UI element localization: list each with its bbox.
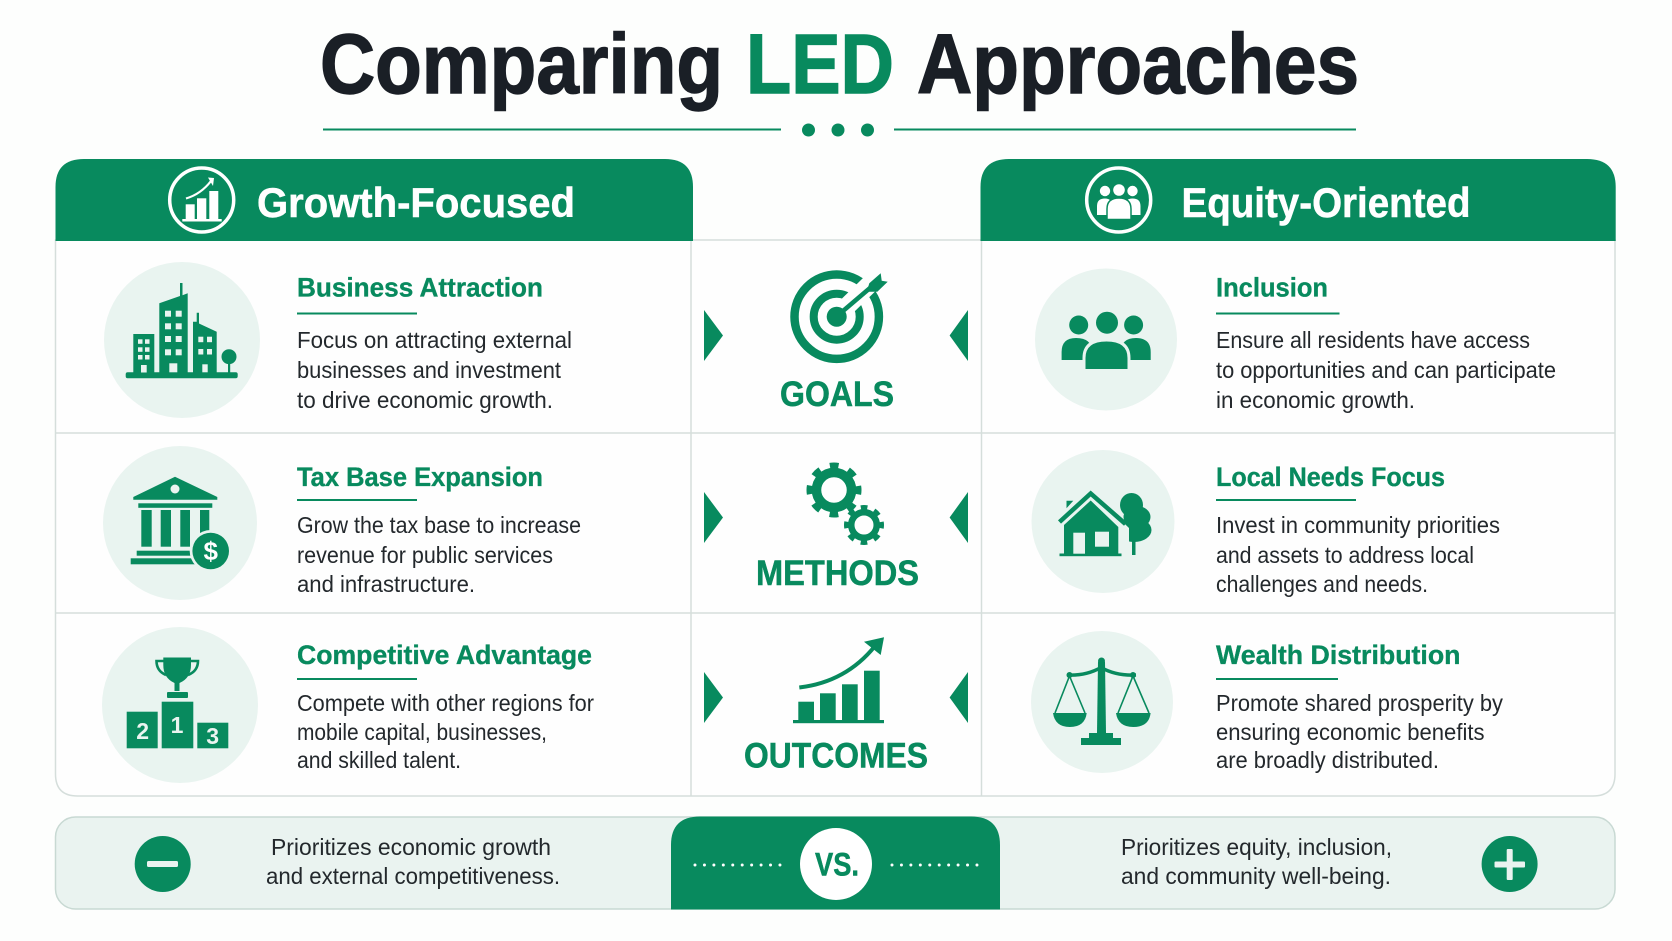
text: local needs focus: and assets to address local (1216, 542, 1474, 568)
text: competitive advantage: mobile capital, businesses, (297, 719, 547, 745)
arrow: goals left (704, 310, 723, 361)
text: competitive advantage (297, 690, 594, 773)
arrow: outcomes left (704, 672, 723, 723)
heading: wealth distribution: Wealth Distribution (1216, 640, 1460, 670)
icon: community people (1035, 268, 1177, 410)
text: local needs focus: challenges and needs. (1216, 571, 1428, 597)
icon: people badge (1087, 168, 1151, 232)
text: inclusion: Ensure all residents have access (1216, 327, 1530, 353)
title: Comparing (320, 17, 723, 111)
icon: gears (810, 466, 882, 542)
row: business attraction (104, 262, 572, 418)
vs badge (671, 816, 1000, 910)
arrow: methods left (704, 492, 723, 543)
text: business attraction (297, 327, 572, 413)
row: wealth distribution (1031, 631, 1503, 773)
text: tax base expansion: and infrastructure. (297, 571, 475, 597)
text: tax base expansion (297, 512, 581, 597)
icon: trophy on podium: 3 (206, 723, 219, 749)
text: growth summary: Prioritizes economic growth (271, 834, 551, 860)
header: equity-oriented: Equity-Oriented (1182, 179, 1470, 226)
text: wealth distribution: are broadly distributed. (1216, 747, 1439, 773)
icon: bank with dollar: $ (203, 536, 218, 566)
row: tax base expansion (103, 446, 581, 600)
title: Approaches (917, 17, 1359, 111)
panel: growth-focused (56, 159, 693, 783)
icon: rising bar chart (793, 637, 884, 723)
icon: city buildings (104, 262, 260, 418)
text: growth summary (266, 834, 560, 889)
icon: trophy on podium (102, 627, 258, 783)
icon: house and tree (1032, 450, 1174, 593)
row: competitive advantage (102, 627, 594, 783)
label: outcomes: OUTCOMES (744, 736, 928, 776)
row: local needs focus (1032, 450, 1500, 597)
vs badge: VS. (815, 846, 859, 882)
text: tax base expansion: Grow the tax base to increase (297, 512, 581, 538)
arrow: outcomes right (950, 672, 968, 723)
heading: local needs focus: Local Needs Focus (1216, 462, 1445, 492)
text: inclusion: in economic growth. (1216, 387, 1415, 413)
text: competitive advantage: and skilled talent. (297, 747, 461, 773)
text: equity summary: and community well-being. (1121, 863, 1391, 889)
icon: growth chart badge (170, 168, 234, 232)
category: outcomes (704, 637, 968, 776)
text: growth summary: and external competitiveness. (266, 863, 560, 889)
text: inclusion (1216, 327, 1556, 413)
text: local needs focus: Invest in community priorities (1216, 512, 1500, 538)
category: methods (704, 466, 968, 593)
category: goals (704, 273, 968, 414)
heading: inclusion: Inclusion (1216, 272, 1328, 302)
text: wealth distribution: Promote shared prosperity by (1216, 690, 1503, 716)
label: methods: METHODS (756, 554, 919, 593)
panel: bottom comparison bar (56, 816, 1615, 910)
panel: center categories (704, 273, 968, 776)
icon: minus (135, 836, 191, 892)
text: competitive advantage: Compete with other regions for (297, 690, 594, 716)
icon: plus (1482, 836, 1538, 892)
heading: competitive advantage: Competitive Advantage (297, 640, 592, 670)
text: wealth distribution: ensuring economic benefits (1216, 719, 1484, 745)
text: tax base expansion: revenue for public services (297, 542, 553, 568)
title divider (323, 124, 1356, 136)
text: inclusion: to opportunities and can participate (1216, 357, 1556, 383)
text: business attraction: businesses and investment (297, 357, 562, 383)
label: goals: GOALS (780, 375, 894, 414)
icon: bank with dollar (103, 446, 257, 600)
arrow: methods right (950, 492, 968, 543)
title (320, 17, 1359, 111)
text: business attraction: Focus on attracting external (297, 327, 572, 353)
text: local needs focus (1216, 512, 1500, 597)
header: equity-oriented (980, 159, 1616, 241)
text: equity summary: Prioritizes equity, inclusion, (1121, 834, 1392, 860)
row: inclusion (1035, 268, 1556, 413)
heading: business attraction: Business Attraction (297, 272, 543, 302)
icon: balance scale (1031, 631, 1173, 773)
panel: equity-oriented (980, 159, 1616, 773)
arrow: goals right (950, 310, 968, 361)
text: wealth distribution (1216, 690, 1503, 773)
text: business attraction: to drive economic growth. (297, 387, 553, 413)
text: equity summary (1121, 834, 1392, 889)
icon: trophy on podium: 2 (136, 718, 149, 744)
icon: trophy on podium: 1 (171, 712, 184, 738)
icon: target (794, 273, 888, 359)
header: growth-focused (56, 159, 693, 241)
heading: tax base expansion: Tax Base Expansion (297, 462, 543, 492)
title: LED (746, 17, 894, 111)
header: growth-focused: Growth-Focused (257, 179, 575, 226)
